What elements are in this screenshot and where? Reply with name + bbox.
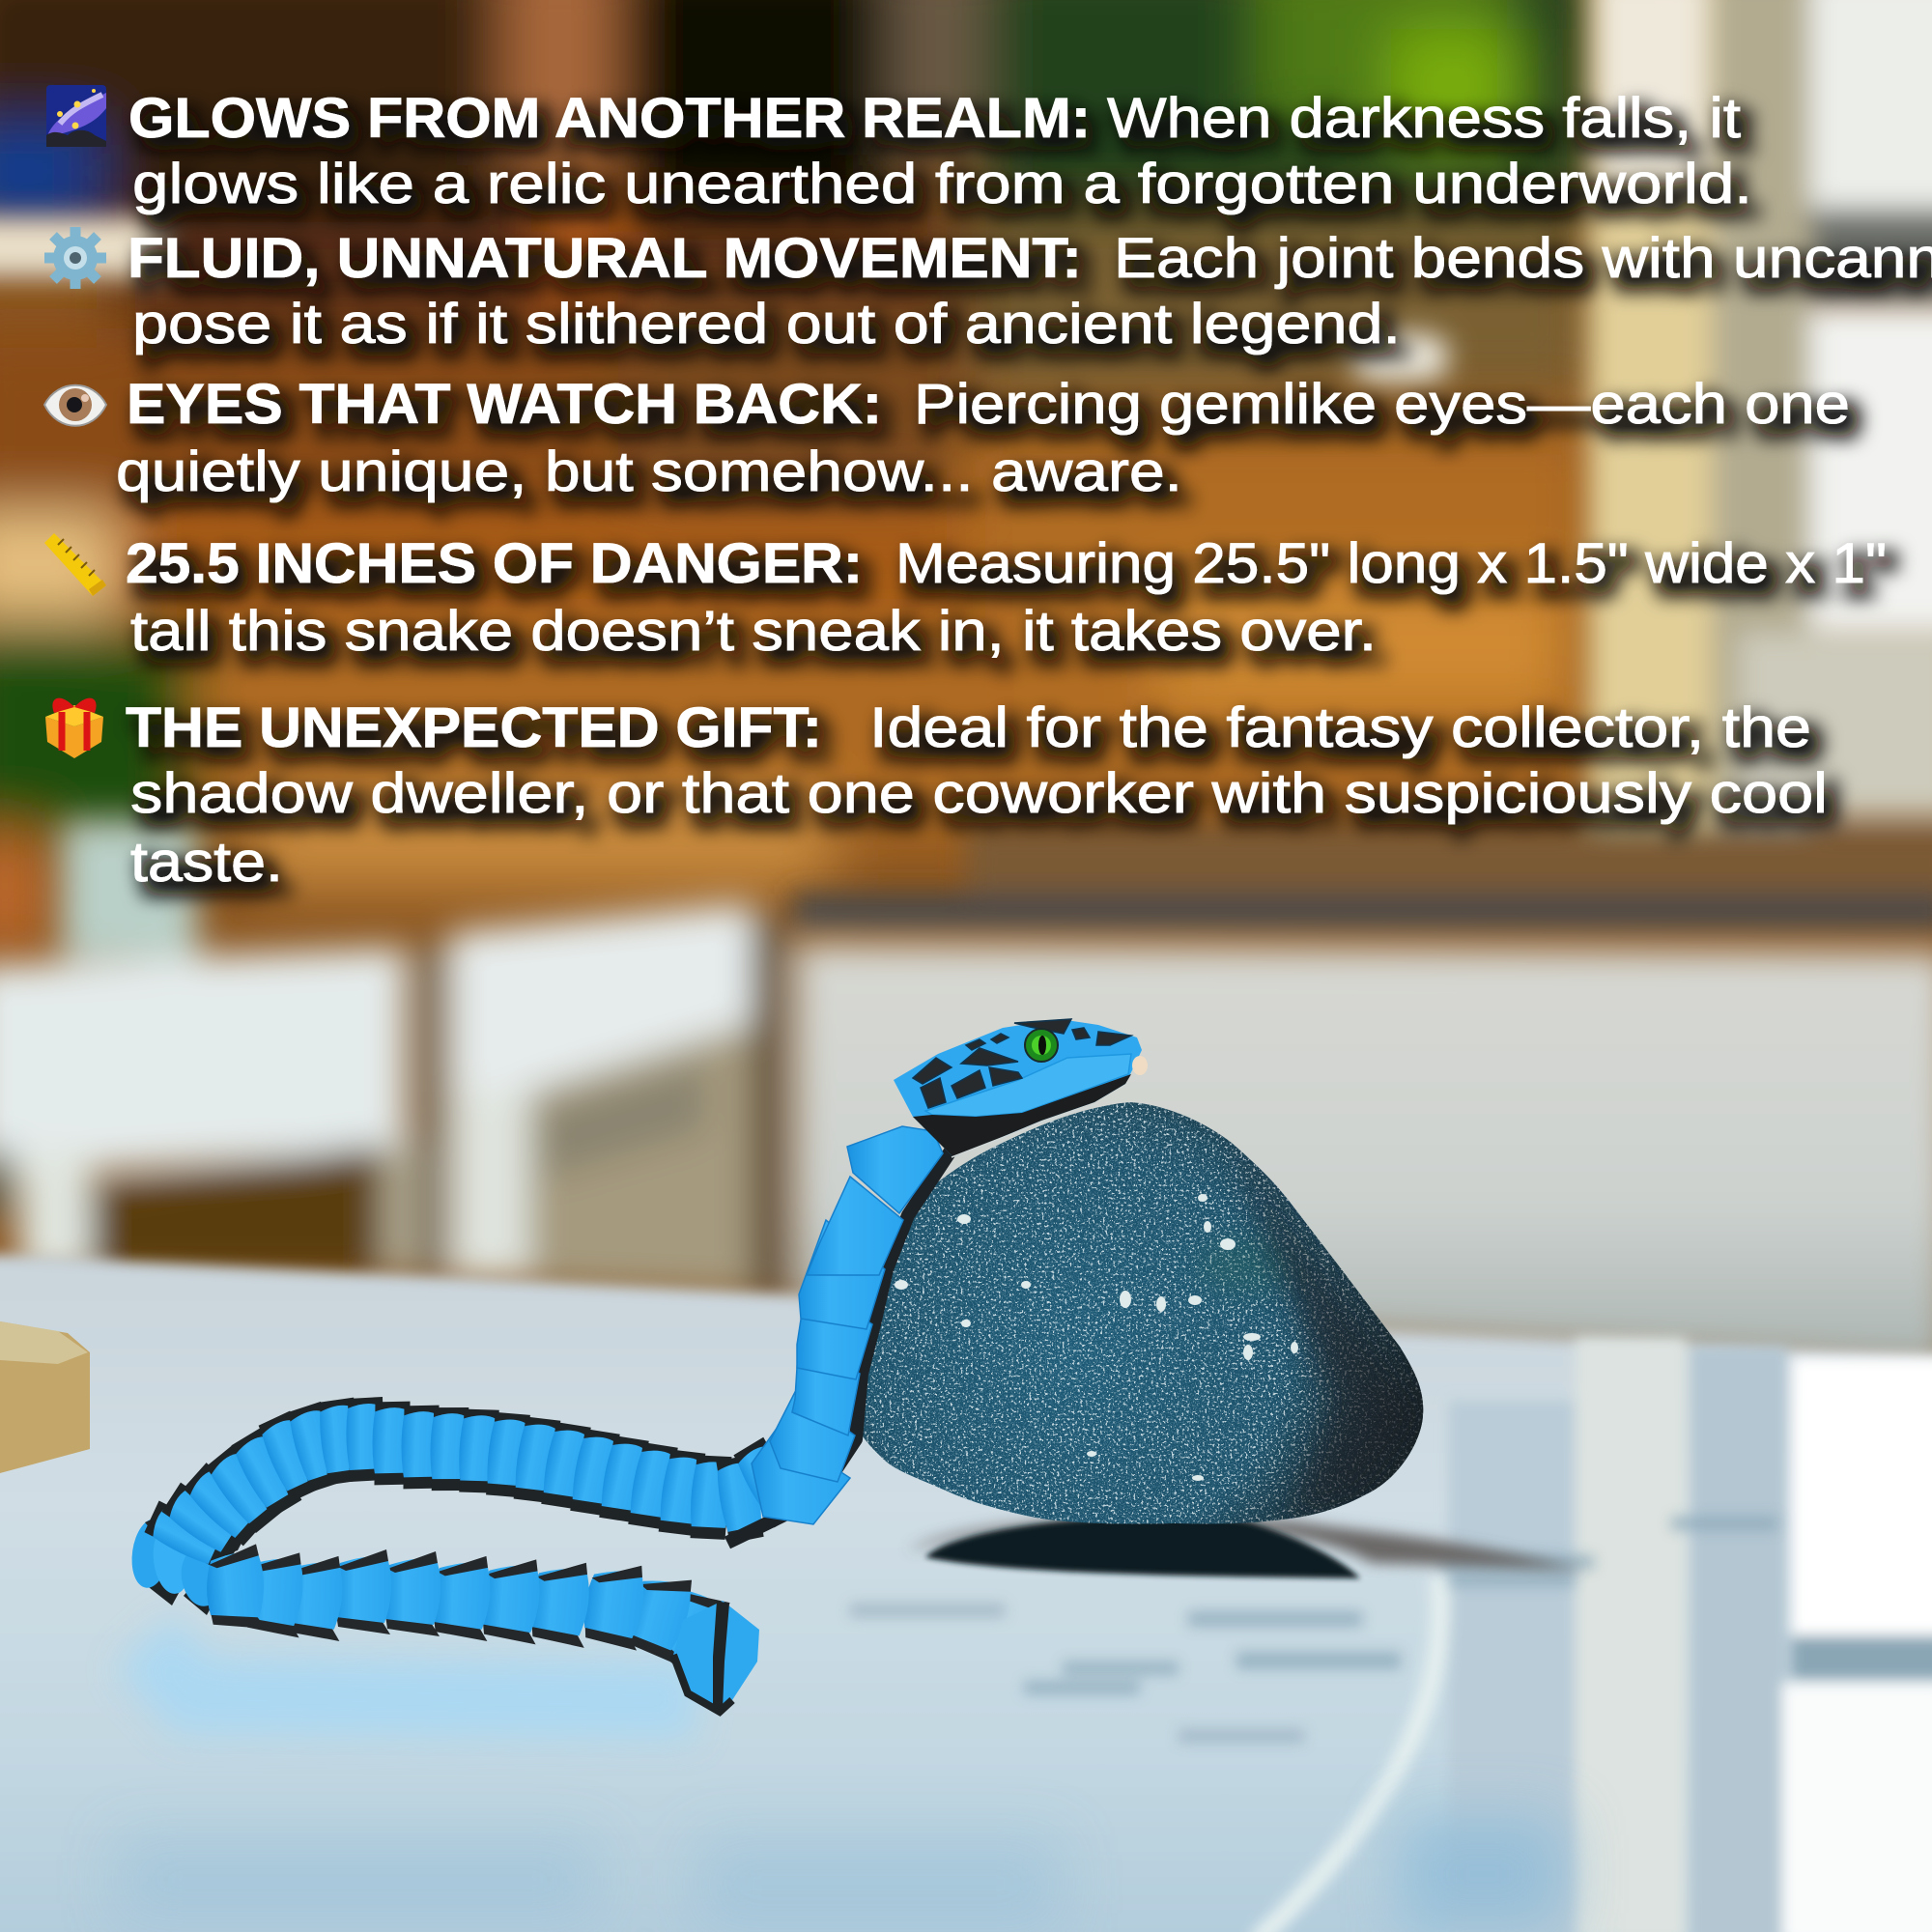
icon: ruler bbox=[44, 533, 106, 596]
feature 1: glows from another realm: glows like a relic unearthed from a forgotten underworld. bbox=[132, 153, 1752, 215]
snake jaw bbox=[913, 1074, 1131, 1157]
snake jaw highlight bbox=[952, 1104, 1096, 1157]
rock shadow bbox=[908, 1516, 1584, 1578]
snake neck: rock-side black edge bbox=[727, 1150, 952, 1543]
feature 4: 25.5 inches of danger: tall this snake doesn’t sneak in, it takes over. bbox=[130, 600, 1377, 663]
feature 2: fluid unnatural movement: Each joint bends with uncanny bbox=[1114, 227, 1932, 290]
icon: gear bbox=[44, 227, 106, 289]
icon: eye bbox=[44, 385, 106, 426]
feature list text bbox=[116, 87, 1932, 894]
feature 5: the unexpected gift: THE UNEXPECTED GIFT: bbox=[126, 696, 822, 759]
feature 3: eyes that watch back: Piercing gemlike eyes—each one bbox=[914, 373, 1850, 436]
background: shelf highlight at left bbox=[0, 217, 164, 277]
rock flecks bbox=[895, 1194, 1298, 1481]
icon: milky way bbox=[46, 85, 106, 147]
feature 5: the unexpected gift: taste. bbox=[130, 831, 283, 894]
countertop veins bbox=[850, 1517, 1777, 1743]
feature 2: fluid unnatural movement: FLUID, UNNATURAL MOVEMENT: bbox=[128, 227, 1082, 290]
feature 4: 25.5 inches of danger: 25.5 INCHES OF DANGER: bbox=[126, 532, 863, 595]
feature 5: the unexpected gift: Ideal for the fantasy collector, the bbox=[869, 696, 1811, 759]
feature 5: the unexpected gift: shadow dweller, or that one coworker with suspiciously cool bbox=[130, 762, 1828, 825]
feature 1: glows from another realm: When darkness falls, it bbox=[1107, 87, 1741, 150]
feature 5: the unexpected gift bbox=[126, 696, 1828, 894]
background: window and frame bbox=[792, 0, 1932, 928]
feature 3: eyes that watch back: EYES THAT WATCH BACK: bbox=[127, 373, 882, 436]
feature 2: fluid unnatural movement bbox=[128, 227, 1932, 355]
feature 1: glows from another realm bbox=[128, 87, 1752, 215]
snake eye bbox=[1025, 1029, 1058, 1062]
snake head bbox=[894, 1019, 1148, 1157]
snake body: bend discs at left bbox=[128, 1513, 249, 1615]
background: upper room shapes bbox=[0, 0, 1594, 947]
snake bbox=[128, 1019, 1148, 1712]
snake tail tip bbox=[673, 1601, 759, 1712]
background: cabinets and wall bbox=[0, 821, 1932, 1372]
icon: gift bbox=[45, 698, 103, 758]
feature 4: 25.5 inches of danger: Measuring 25.5" long x 1.5" wide x 1" bbox=[895, 532, 1887, 595]
snake body: upper run segments bbox=[142, 1397, 807, 1573]
rock bbox=[831, 1092, 1449, 1536]
countertop soft blue patches bbox=[116, 1816, 1565, 1932]
feature 3: eyes that watch back: quietly unique, but somehow... aware. bbox=[116, 440, 1182, 503]
feature 4: 25.5 inches of danger bbox=[126, 532, 1887, 663]
feature 2: fluid unnatural movement: pose it as if it slithered out of ancient legend. bbox=[132, 293, 1401, 355]
snake body: tail run segments bbox=[204, 1544, 734, 1677]
feature 3: eyes that watch back bbox=[116, 373, 1850, 503]
snake neck: blue segments bbox=[752, 1126, 943, 1524]
snake reflection bbox=[145, 1642, 696, 1700]
wood block at left bbox=[0, 1321, 90, 1473]
countertop reflections bbox=[1256, 1338, 1932, 1932]
snake lip bbox=[925, 1054, 1131, 1117]
countertop: marble bbox=[0, 1254, 1932, 1932]
snake tooth bbox=[1132, 1056, 1148, 1075]
feature 1: glows from another realm: GLOWS FROM ANOTHER REALM: bbox=[128, 87, 1091, 150]
snake head scales bbox=[913, 1019, 1131, 1108]
